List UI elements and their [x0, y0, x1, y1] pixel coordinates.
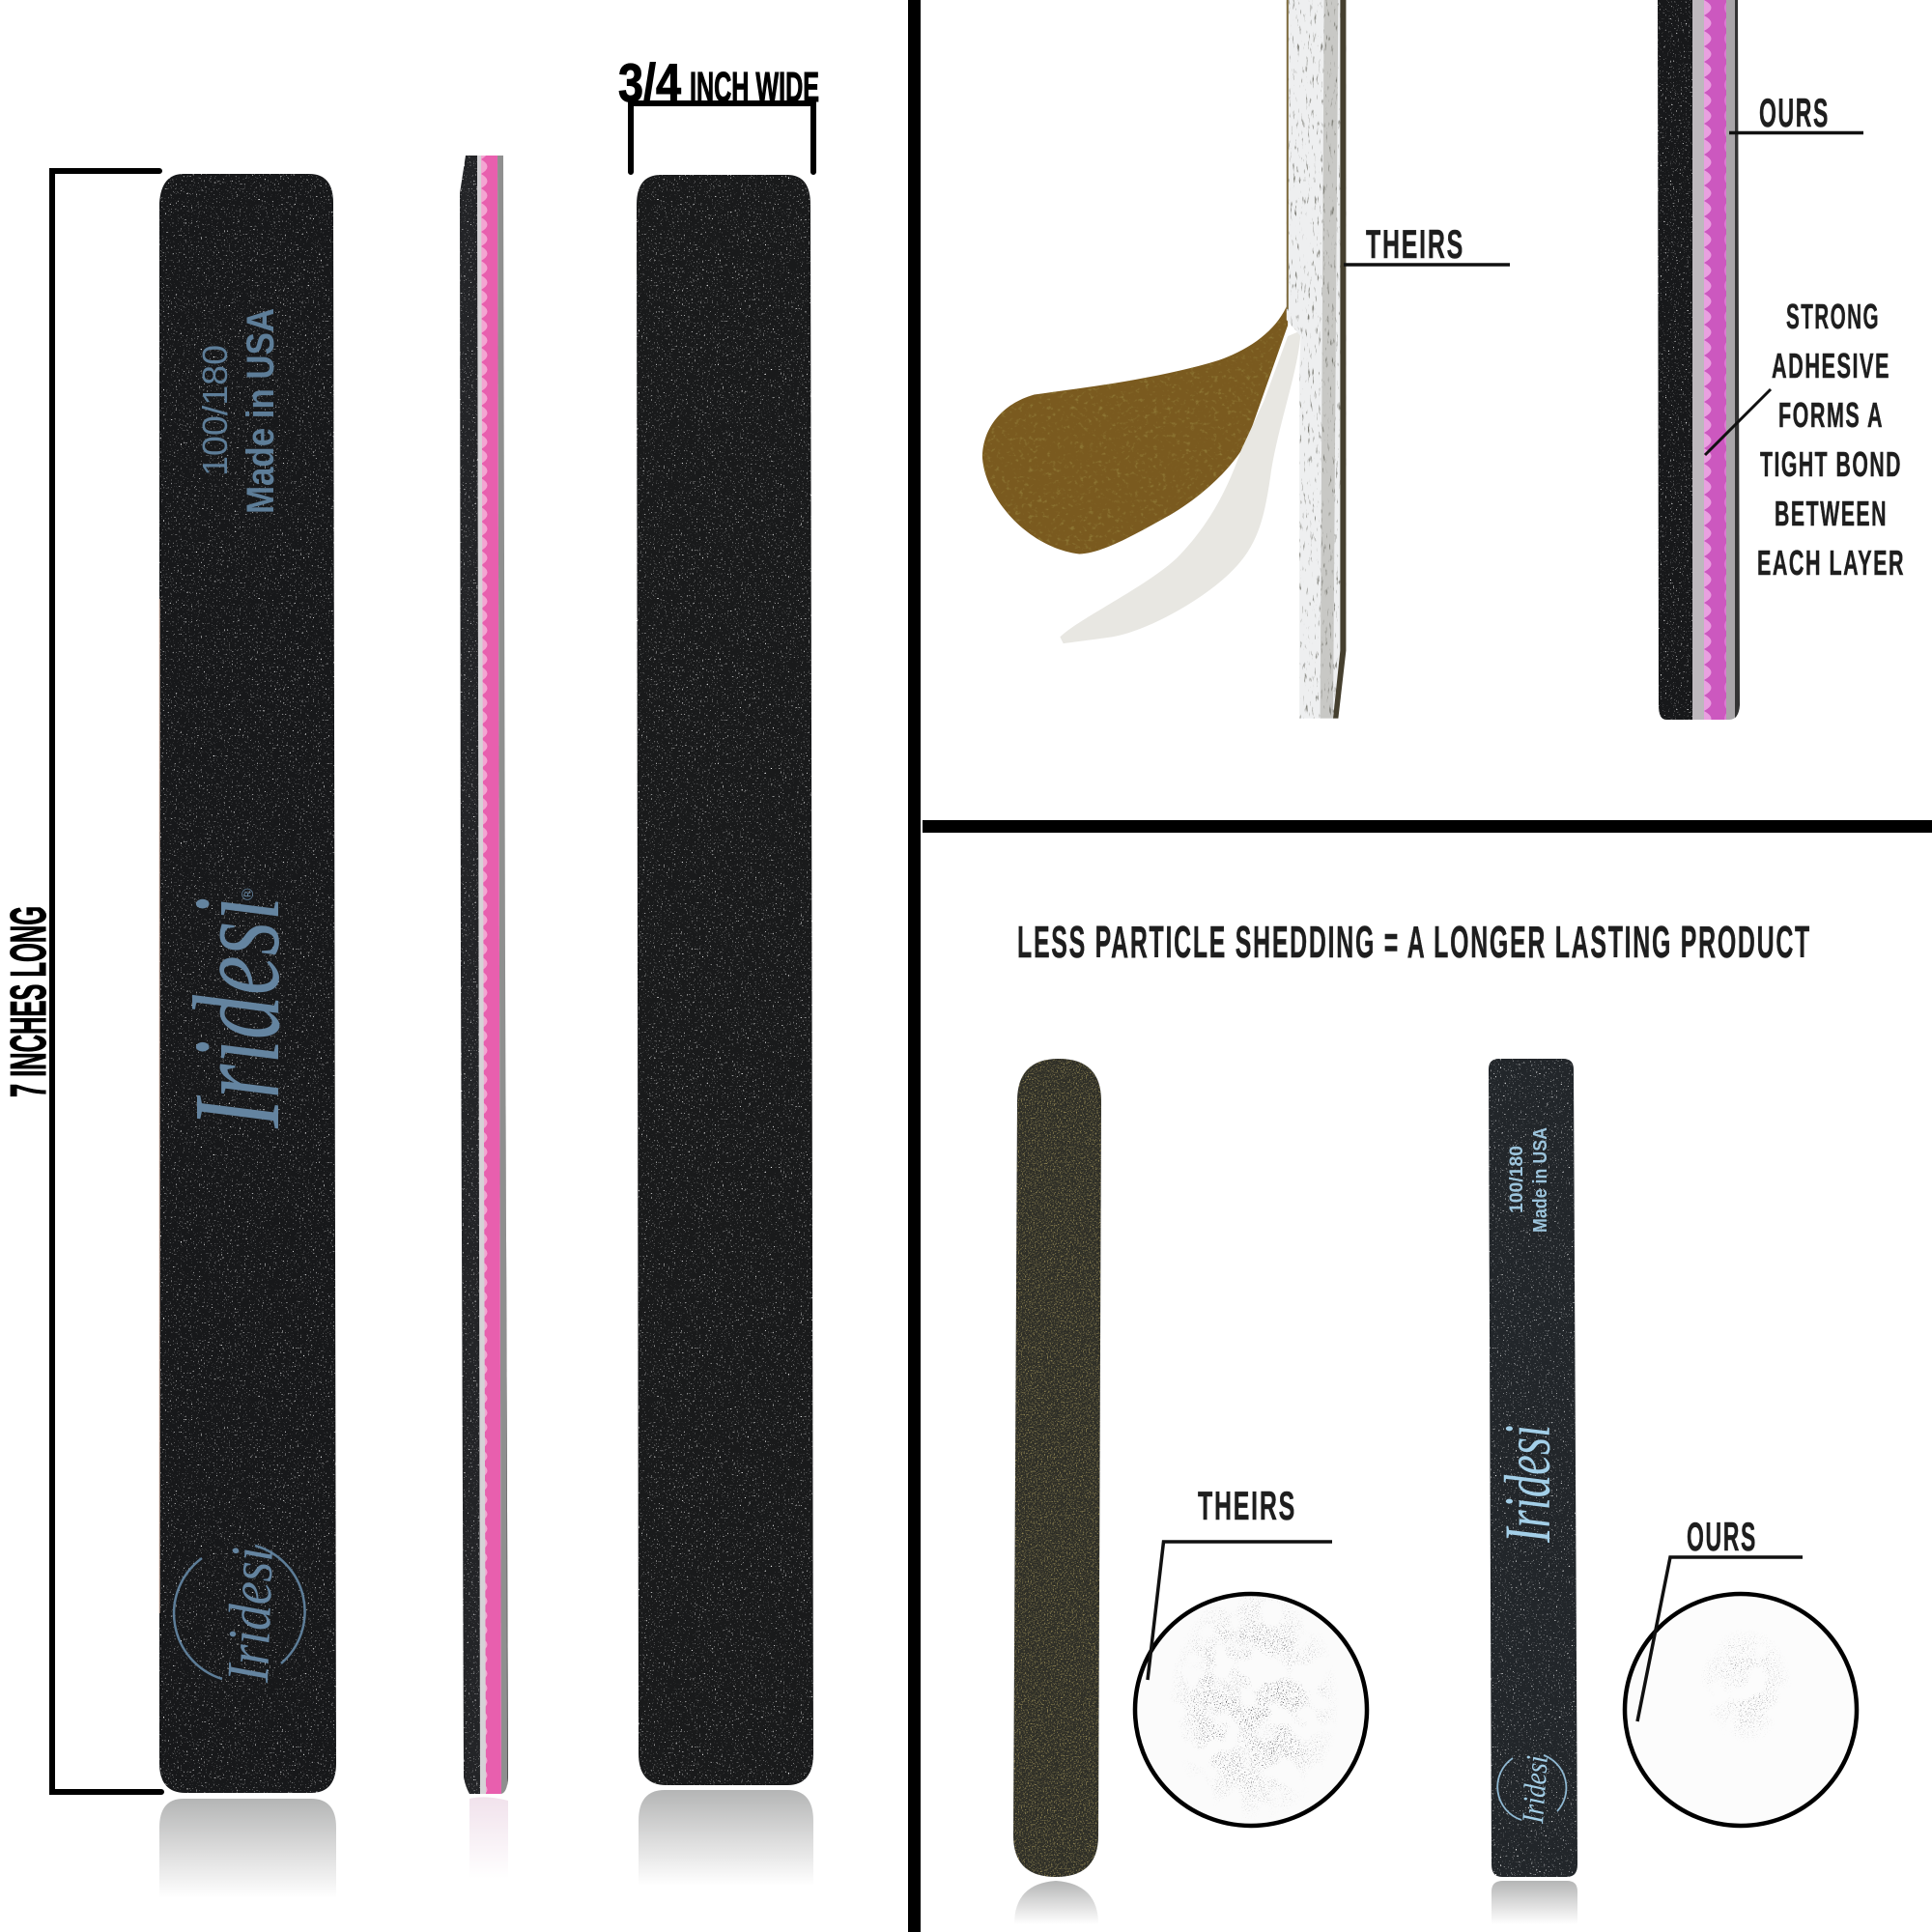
nail file front with branding — [158, 174, 336, 1793]
printed grit label: 100/180 — [195, 345, 235, 476]
round logo: Iridesi — [215, 1546, 286, 1684]
adhesive callout text — [1757, 297, 1905, 582]
our callout leader — [1637, 1557, 1803, 1721]
round logo — [174, 1546, 305, 1684]
competitor file — [1013, 1059, 1101, 1877]
our file with bonded layers — [1658, 0, 1741, 721]
competitor leader line — [1344, 263, 1510, 267]
competitor file reflection — [1014, 1881, 1098, 1924]
competitor callout leader — [1148, 1542, 1332, 1680]
panel: dimensions — [1, 52, 819, 1898]
round logo — [1497, 1754, 1566, 1825]
panel: particle shedding — [1013, 917, 1857, 1924]
panel: adhesive comparison — [982, 0, 1905, 721]
our particle circle — [1625, 1594, 1857, 1826]
panel: dimensions: 7 INCHES LONG — [1, 906, 57, 1097]
reflection of side view — [469, 1797, 508, 1879]
our callout label: OURS — [1687, 1514, 1757, 1559]
file body — [1287, 0, 1346, 719]
printed grit label: 100/180 — [1507, 1146, 1527, 1213]
panel: horizontal divider — [923, 820, 1932, 833]
round logo: Iridesi — [1515, 1754, 1554, 1825]
our file reflection — [1492, 1881, 1577, 1924]
competitor label: THEIRS — [1366, 221, 1464, 267]
reflection of back file — [639, 1790, 813, 1886]
nail file side view — [460, 156, 508, 1794]
printed brand name: Iridesi — [168, 896, 305, 1129]
nail file back — [637, 175, 813, 1785]
printed made in USA label: Made in USA — [240, 308, 282, 514]
registered mark: ® — [239, 888, 257, 900]
printed brand name: Iridesi — [1491, 1425, 1564, 1544]
width bracket — [631, 103, 813, 172]
competitor callout label: THEIRS — [1198, 1483, 1296, 1528]
our leader line — [1729, 131, 1863, 134]
competitor particle circle — [1135, 1594, 1367, 1826]
our label: OURS — [1759, 90, 1830, 135]
printed made in USA label: Made in USA — [1530, 1127, 1551, 1233]
length bracket — [52, 171, 161, 1792]
our file — [1489, 1059, 1577, 1877]
peeling brown layer — [982, 303, 1288, 554]
width label: 3/4 — [618, 52, 681, 113]
competitor file with peeling layers — [982, 0, 1346, 719]
reflection of front file — [159, 1799, 336, 1898]
panel: vertical divider — [908, 0, 921, 1932]
width label — [618, 52, 819, 113]
peeling white layer — [1060, 330, 1301, 643]
width label: INCH WIDE — [690, 64, 819, 111]
adhesive pointer line — [1705, 389, 1771, 455]
